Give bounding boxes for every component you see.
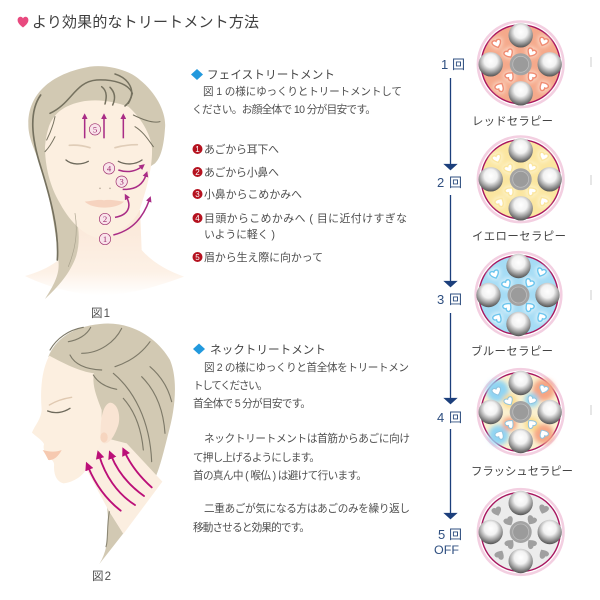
label: yellow therapy: イエローセラピー	[472, 230, 566, 243]
arrow 1 to 2	[445, 78, 456, 170]
steps list	[192, 142, 407, 264]
device: red therapy	[478, 22, 564, 107]
hair strands	[33, 74, 160, 267]
circled numbers: 2	[103, 214, 107, 224]
arrow 2 to 3	[445, 195, 456, 286]
step 5 label: 5 回	[438, 527, 462, 542]
steps list: 目頭からこめかみへ ( 目に近付けすぎな	[204, 211, 407, 225]
brow	[49, 397, 72, 405]
ear	[101, 403, 119, 443]
steps list: あごから小鼻へ	[204, 165, 279, 179]
panel: neck treatment text	[193, 344, 410, 534]
step 3 label: 3 回	[437, 292, 462, 307]
neck instructions	[193, 361, 410, 534]
step 1 label: 1 回	[441, 57, 465, 72]
eyes	[66, 160, 142, 164]
caption: figure 2: 図 2	[92, 570, 111, 583]
neck	[85, 437, 162, 534]
intro text: ください。お顔全体で 10 分が目安です。	[192, 103, 376, 116]
icon: heart	[18, 17, 28, 28]
caption: figure 1: 図 1	[91, 307, 110, 320]
nose	[99, 187, 111, 189]
intro text	[192, 85, 402, 116]
arrow 4 to 5	[445, 429, 456, 518]
circled numbers: 1	[103, 234, 107, 244]
hair	[48, 324, 175, 564]
shoulders and neck	[25, 210, 184, 295]
illustration: side profile	[32, 324, 175, 564]
label: red therapy: レッドセラピー	[472, 115, 553, 128]
steps list: 1	[195, 145, 200, 154]
steps list: あごから耳下へ	[204, 142, 279, 156]
steps list: 5	[195, 253, 200, 262]
hair strands	[50, 327, 172, 547]
eye	[48, 408, 70, 413]
arrow 3 to 4	[445, 313, 456, 404]
circled numbers: 3	[120, 177, 124, 187]
intro text: 図 1 の様にゆっくりとトリートメントして	[203, 85, 402, 98]
neck arrows	[88, 453, 152, 511]
hair mass	[28, 66, 165, 299]
neck instructions: トしてください。	[193, 380, 268, 392]
brows	[69, 145, 137, 148]
steps list: 4	[195, 214, 200, 223]
massage arrows	[85, 117, 149, 235]
label: blue therapy: ブルーセラピー	[471, 344, 553, 358]
neck instructions: 二重あごが気になる方はあごのみを繰り返し	[204, 502, 410, 515]
illustration: front face	[25, 66, 184, 299]
panel: face treatment text	[191, 68, 407, 264]
step 4 label: 4 回	[437, 410, 462, 425]
steps list: 2	[195, 168, 200, 177]
neck instructions: 移動させると効果的です。	[193, 521, 310, 534]
heading: face treatment: フェイストリートメント	[207, 68, 335, 82]
lips	[43, 450, 62, 460]
heading: neck treatment: ネックトリートメント	[210, 344, 326, 356]
title	[18, 14, 259, 31]
flash colour patches	[487, 379, 555, 445]
device: flash therapy	[478, 369, 564, 455]
lips	[85, 200, 124, 208]
edge marks	[590, 57, 592, 415]
steps list: 3	[195, 190, 200, 199]
face skin	[45, 100, 152, 238]
device: blue therapy	[476, 252, 561, 338]
steps list: いように軽く )	[204, 228, 275, 241]
neck instructions: ネックトリートメントは首筋からあごに向け	[204, 432, 410, 445]
face	[32, 356, 102, 483]
circled numbers: 5	[93, 124, 97, 134]
label: flash therapy: フラッシュセラピー	[471, 465, 573, 478]
circled numbers: 4	[107, 163, 112, 173]
step 2 label: 2 回	[437, 175, 462, 190]
neck instructions: 図 2 の様にゆっくりと首全体をトリートメン	[204, 361, 409, 374]
circled numbers	[89, 124, 127, 245]
steps list: 眉から生え際に向かって	[204, 250, 323, 264]
heading text: より効果的なトリートメント方法	[32, 14, 259, 31]
neck instructions: 首の真ん中 ( 喉仏 ) は避けて行います。	[193, 469, 367, 482]
device: yellow therapy	[478, 136, 564, 222]
earlobe	[100, 432, 108, 442]
steps list: 小鼻からこめかみへ	[204, 187, 302, 201]
device: off	[478, 489, 564, 575]
neck instructions: 首全体で 5 分が目安です。	[193, 397, 311, 410]
sequence flow: press counts and arrows	[434, 57, 465, 557]
off label: OFF	[434, 543, 459, 557]
neck instructions: て押し上げるようにします。	[193, 451, 320, 464]
